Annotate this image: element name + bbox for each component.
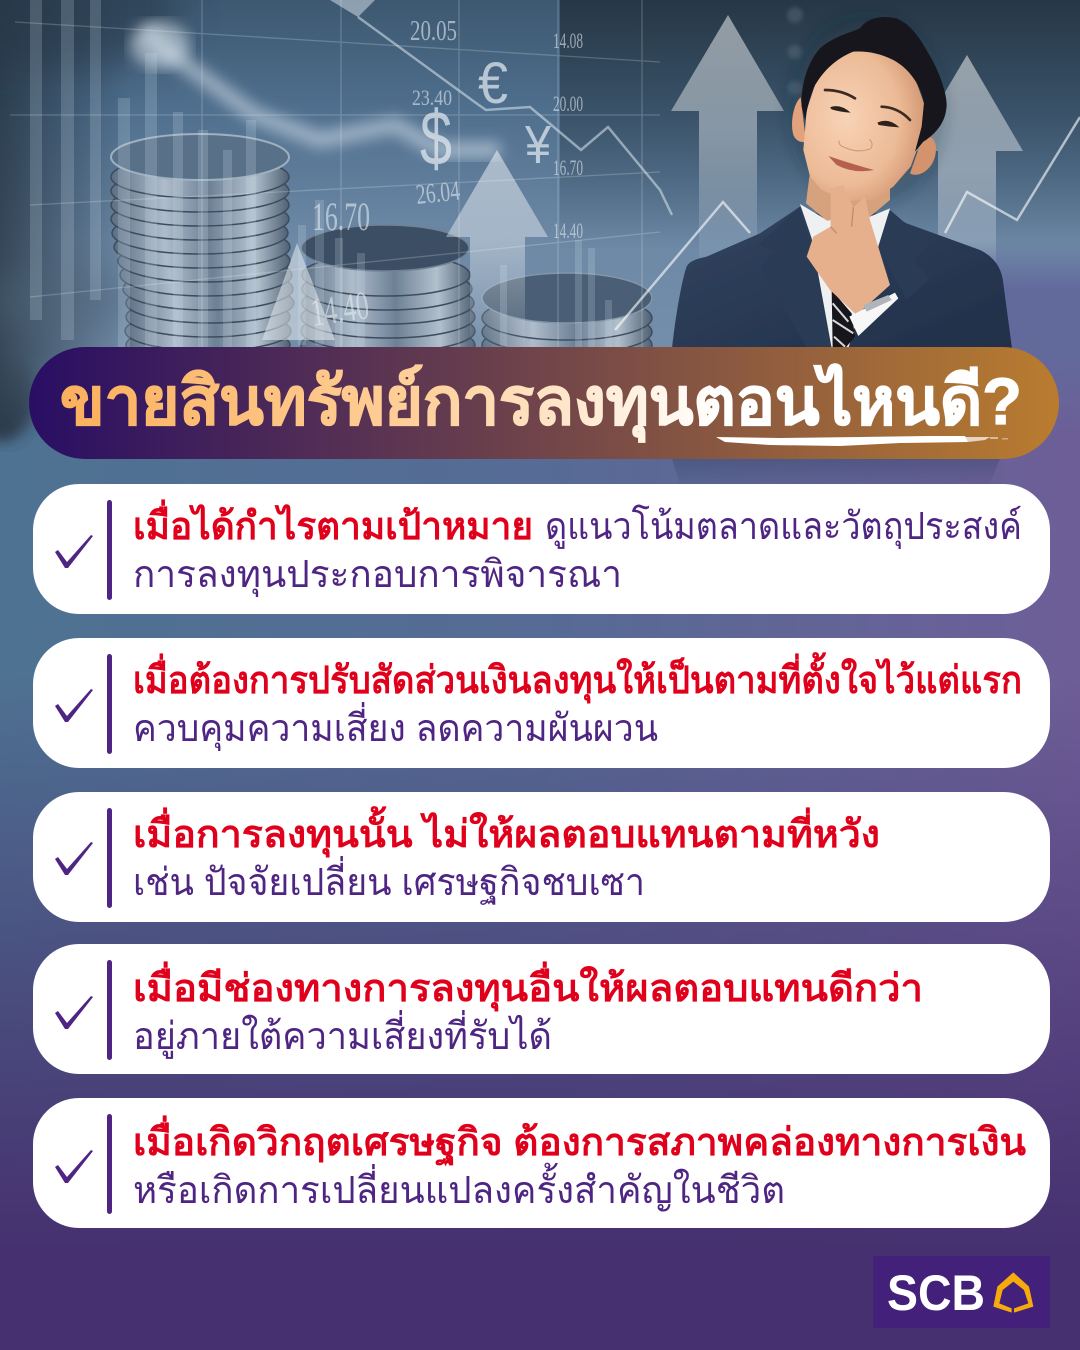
right edge fade to purple (976, 248, 1080, 290)
panel: reason 5 (33, 1098, 1050, 1228)
chart numbers: 16.70 (553, 155, 583, 180)
mouth (828, 156, 874, 171)
nose (839, 139, 872, 151)
heading: เมื่อเกิดวิกฤตเศรษฐกิจ ต้องการสภาพคล่องทางการเงิน (133, 1115, 1026, 1167)
panel: reason 1: ดูแนวโน้มตลาดและวัตถุประสงค์ (545, 504, 1022, 549)
logo: SCB (873, 1256, 1050, 1328)
currency symbols: $ (420, 94, 452, 182)
lapels (758, 207, 832, 348)
title pill (29, 347, 1059, 459)
chart numbers: 26.04 (414, 176, 461, 211)
chart numbers: 14.08 (553, 28, 583, 53)
soft shadow (787, 13, 947, 207)
heading: เมื่อได้กำไรตามเป้าหมาย (133, 499, 533, 548)
shirt collar (800, 204, 890, 348)
face (803, 50, 924, 201)
photo: financial chart background with coins and arrows (0, 0, 1080, 440)
rising trend line (615, 117, 1080, 330)
coin stacks (111, 134, 652, 367)
title text: ขายสินทรัพย์การลงทุนตอนไหนดี? (60, 363, 1022, 443)
panel: reason 1 (33, 484, 1050, 614)
eyes (830, 106, 899, 127)
icon: SCB gold leaf (993, 1272, 1033, 1313)
eyebrows (825, 90, 910, 120)
heading: เมื่อมีช่องทางการลงทุนอื่นให้ผลตอบแทนดีกว่า (133, 961, 923, 1012)
photo: businessman (672, 13, 1012, 348)
heading: เมื่อต้องการปรับสัดส่วนเงินลงทุนให้เป็นตามที่ตั้งใจไว้แต่แรก (133, 652, 1022, 704)
currency symbols (420, 62, 551, 170)
blurred trend line (145, 30, 500, 150)
hair (802, 17, 947, 152)
chart numbers: 23.40 (412, 85, 452, 110)
icon: check (55, 535, 93, 568)
icon: check (55, 996, 93, 1029)
hand (807, 185, 890, 315)
chart numbers: 14.40 (553, 218, 583, 243)
panel: reason 3 (33, 792, 1050, 922)
currency symbols: € (478, 51, 508, 116)
panel: reason 3: เช่น ปัจจัยเปลี่ยน เศรษฐกิจชบเซา (133, 856, 645, 905)
jacket (672, 207, 1012, 348)
heading: เมื่อการลงทุนนั้น ไม่ให้ผลตอบแทนตามที่หวัง (133, 806, 880, 858)
chart numbers: 20.00 (553, 91, 583, 116)
chart numbers: 20.05 (410, 15, 457, 47)
logo: SCB: SCB (887, 1265, 985, 1321)
panel: reason 1: การลงทุนประกอบการพิจารณา (133, 554, 622, 597)
grid lines (10, 0, 660, 347)
panel: reason 2 (33, 638, 1050, 768)
panel: reason 4: อยู่ภายใต้ความเสี่ยงที่รับได้ (133, 1010, 552, 1059)
left dark blur beside title (0, 342, 36, 442)
trend arrow head (330, 0, 375, 17)
chart numbers: 14.40 (308, 282, 372, 335)
lights (787, 7, 803, 95)
icon: check (55, 689, 93, 722)
ears (792, 97, 806, 142)
icon: check (55, 842, 93, 875)
neck (806, 170, 890, 221)
brush underline (716, 436, 1008, 446)
chart bars (30, 0, 612, 348)
cuff and watch (849, 293, 898, 336)
head (792, 17, 947, 221)
chart numbers (308, 15, 583, 335)
currency symbols: ¥ (524, 115, 552, 175)
panel: reason 4 (33, 944, 1050, 1074)
panel: reason 5: หรือเกิดการเปลี่ยนแปลงครั้งสำคัญในชีวิต (133, 1162, 785, 1212)
icon: check (55, 1150, 93, 1183)
arrows (262, 15, 1023, 347)
tie (832, 290, 855, 348)
panel: reason 2: ควบคุมความเสี่ยง ลดความผันผวน (133, 702, 658, 751)
falling trend line (358, 17, 672, 215)
suit hint below title (672, 459, 1000, 484)
chart numbers: 16.70 (312, 194, 370, 239)
